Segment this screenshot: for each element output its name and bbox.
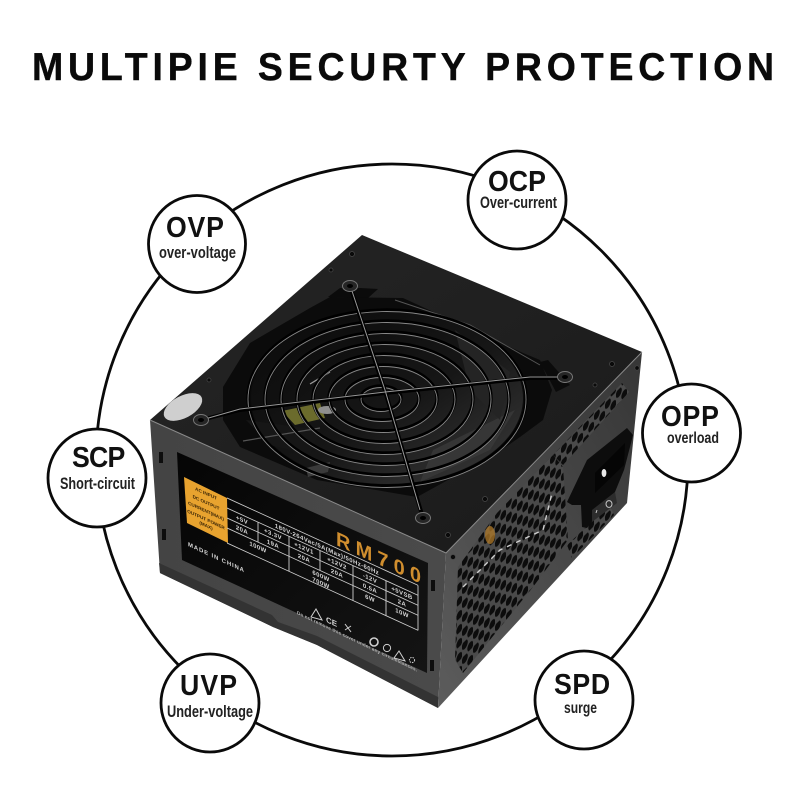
right face	[438, 352, 642, 708]
fan opening	[223, 297, 552, 497]
specification table: 100W	[249, 540, 267, 555]
specification table: 20A	[331, 568, 343, 580]
ring connecting the protection badges	[96, 164, 688, 756]
specification table: 2A	[398, 598, 406, 609]
side slots	[159, 452, 435, 671]
badge: UVP under-voltage: Under-voltage	[167, 703, 253, 721]
orange input/output legend	[184, 477, 228, 543]
badge: SCP short-circuit	[48, 429, 146, 527]
left face	[150, 420, 446, 708]
badge: OCP over-current	[468, 151, 566, 249]
specification table: 6W	[365, 593, 375, 604]
specification table: 20A	[298, 553, 310, 565]
orange input/output legend: AC INPUT	[195, 486, 217, 502]
fan mount wings	[328, 288, 570, 392]
specification table: 600W	[312, 569, 330, 584]
badge: SPD surge: surge	[564, 700, 597, 717]
badge: UVP under-voltage: UVP	[180, 669, 237, 701]
badge: SCP short-circuit: Short-circuit	[60, 475, 135, 493]
warning line: Do not remove this cover under any circumstances.	[297, 610, 418, 674]
badge: OPP overload	[642, 384, 740, 482]
fan blades	[243, 312, 523, 484]
specification table: +12V1	[294, 541, 314, 557]
specification table: 19A	[267, 538, 279, 551]
specification table: +3.3V	[264, 527, 282, 542]
housing edge highlight above fan	[395, 300, 540, 365]
top face	[150, 235, 642, 553]
badge: SPD surge: SPD	[554, 668, 610, 700]
power socket and switch	[567, 428, 633, 528]
black specification label	[177, 452, 428, 673]
badge: OCP over-current: Over-current	[480, 194, 557, 212]
top edge highlight	[150, 352, 642, 553]
specification table: 10W	[395, 607, 409, 620]
model name: RM700	[336, 528, 421, 589]
fan guard cross wires	[201, 286, 565, 518]
specification table: -12V	[363, 572, 377, 586]
badge: OVP over-voltage: over-voltage	[159, 244, 236, 262]
orange input/output legend: OUTPUT POWER	[187, 509, 225, 532]
orange input/output legend: CURRENT(MAX)	[188, 501, 224, 523]
specification table: +12V2	[327, 556, 347, 572]
badge: SCP short-circuit: SCP	[72, 441, 125, 473]
badge: OPP overload: overload	[667, 430, 719, 447]
made in china: MADE IN CHINA	[188, 541, 244, 574]
specification table: 20A	[236, 524, 248, 537]
round sticker	[159, 387, 207, 427]
specification table: +5VSB	[391, 585, 413, 602]
badge: SPD surge	[535, 651, 633, 749]
fan guard rings	[248, 310, 526, 488]
specification table: 0.5A	[363, 582, 377, 596]
screws	[194, 280, 572, 524]
badge: OCP over-current: OCP	[488, 165, 546, 197]
certification icons	[311, 609, 415, 663]
ventilation holes	[455, 383, 629, 673]
badge: OPP overload: OPP	[661, 400, 719, 432]
power supply unit	[150, 235, 642, 708]
badge: OVP over-voltage	[148, 196, 246, 292]
orange input/output legend: (MAX)	[199, 520, 213, 532]
small case holes	[207, 252, 639, 560]
specification table	[227, 498, 418, 631]
specification table: 700W	[312, 576, 330, 591]
lower base band	[159, 563, 438, 708]
badge: UVP under-voltage	[161, 654, 259, 752]
specification table: +5V	[236, 514, 248, 527]
CE mark: CE	[326, 614, 337, 629]
orange input/output legend: DC OUTPUT	[193, 494, 219, 512]
title: MULTIPIE SECURTY PROTECTION	[32, 45, 774, 89]
specification table: 180V-264Vac/5A(Max)/50Hz-60Hz	[275, 523, 379, 577]
badge: OVP over-voltage: OVP	[166, 211, 224, 243]
